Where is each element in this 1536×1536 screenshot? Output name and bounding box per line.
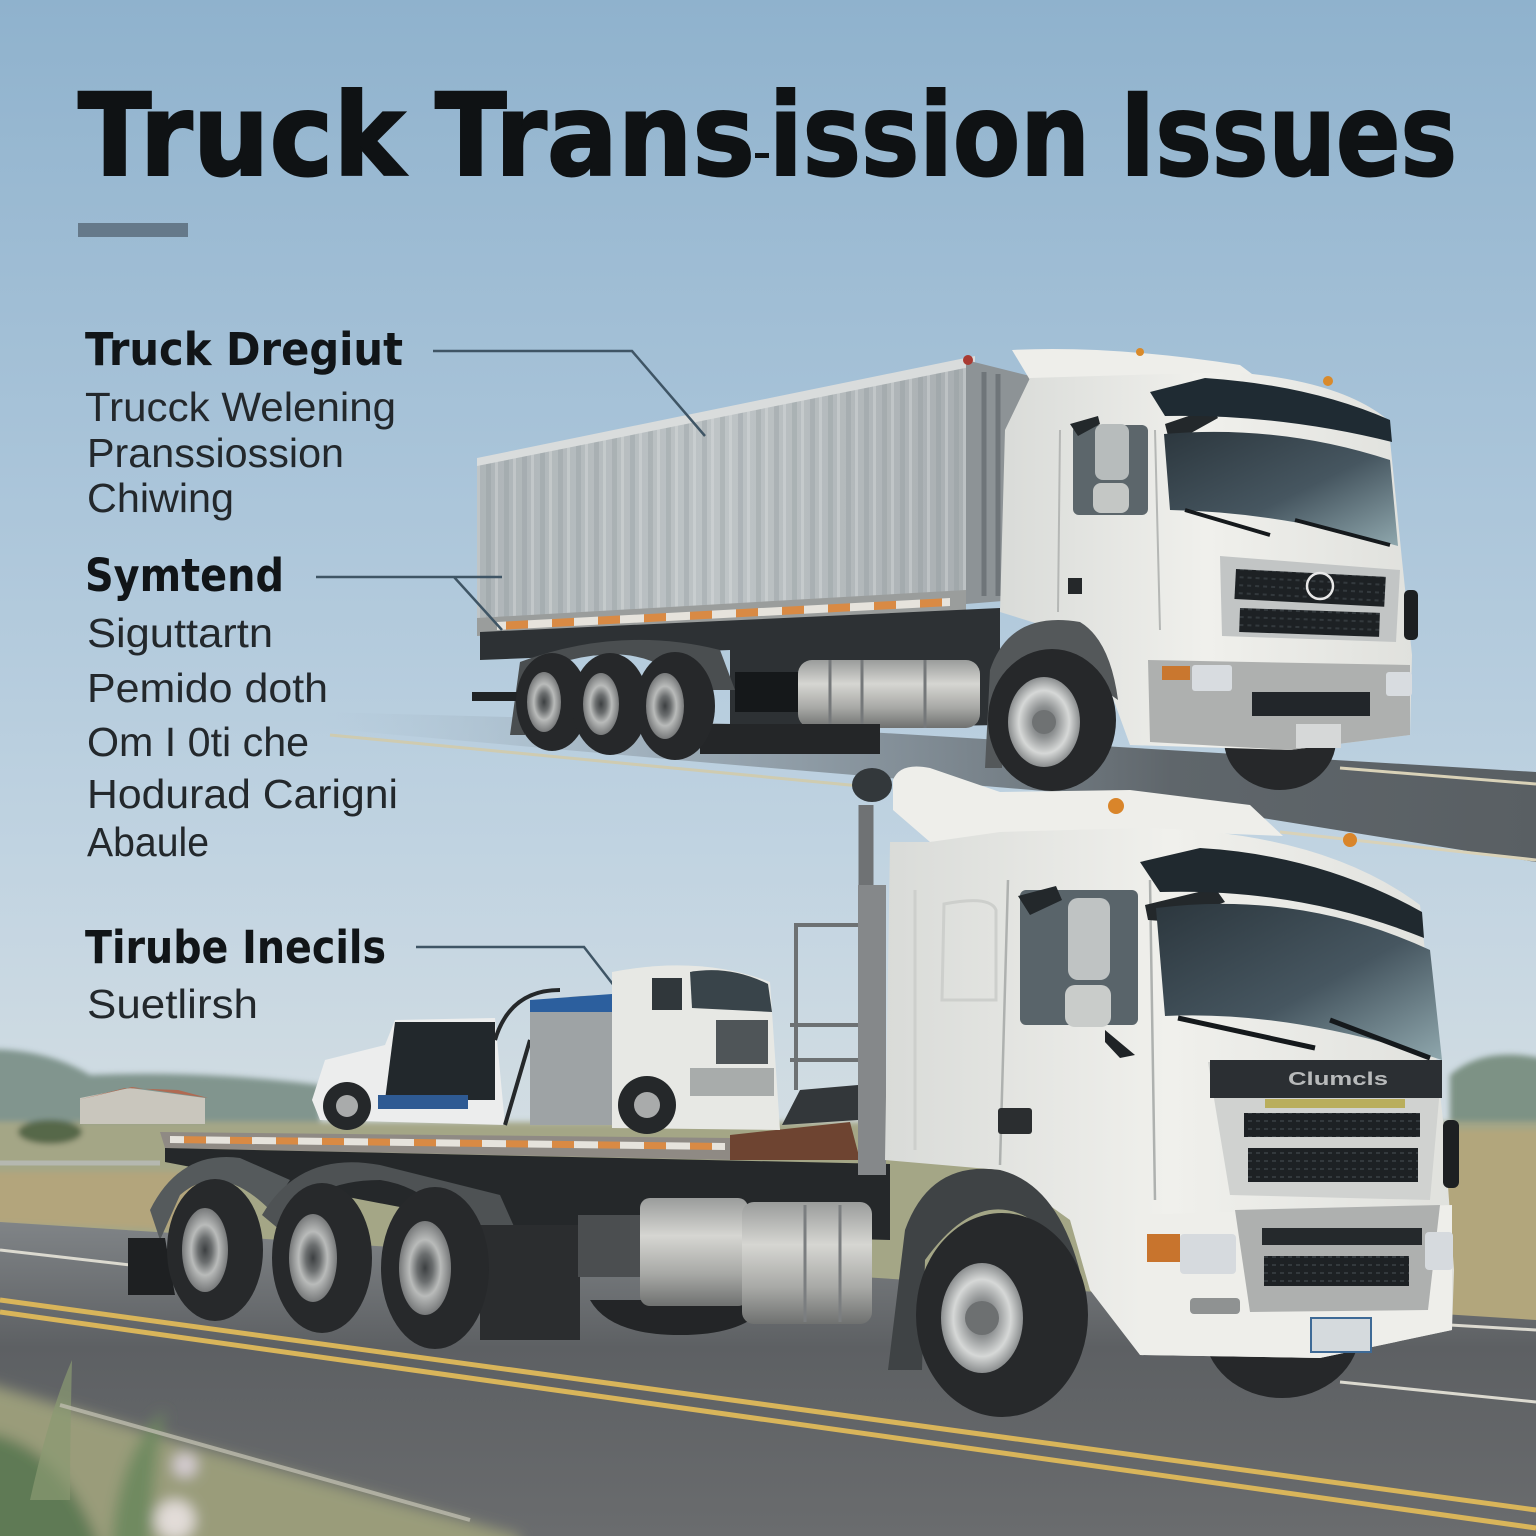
leader line 3 bbox=[416, 947, 615, 987]
text block: section 1: Chiwing bbox=[87, 475, 234, 521]
text block: section 2: Om I 0ti che bbox=[87, 719, 309, 765]
front wheel bbox=[916, 1213, 1088, 1417]
text block: section 2 bbox=[87, 610, 398, 865]
machinery behind cab bbox=[782, 1085, 858, 1125]
leader line 1 bbox=[433, 351, 705, 436]
text block: section 3: Suetlirsh bbox=[87, 981, 258, 1027]
upper road bbox=[320, 712, 1536, 862]
text block: section 1: Pranssiossion bbox=[87, 430, 344, 476]
railing bbox=[790, 925, 880, 1090]
title accent bar bbox=[78, 223, 188, 237]
small white truck bbox=[612, 965, 780, 1134]
cab body bbox=[885, 766, 1459, 1370]
lower truck bbox=[128, 766, 1459, 1417]
rear wheels bbox=[167, 1179, 770, 1349]
front wheel bbox=[988, 649, 1116, 791]
heading: truck dregiut: Truck Dregiut bbox=[85, 323, 403, 376]
title: Truck bbox=[78, 69, 407, 202]
container side bbox=[477, 355, 1030, 636]
chassis bbox=[480, 608, 1000, 730]
title: Issues bbox=[1120, 69, 1457, 202]
exhaust stack bbox=[852, 768, 892, 1175]
heading: symtend: Symtend bbox=[85, 549, 284, 602]
text block: section 2: Siguttartn bbox=[87, 610, 273, 656]
small truck load bbox=[312, 925, 880, 1134]
small pickup bbox=[312, 990, 560, 1130]
title: Trans bbox=[435, 69, 755, 202]
rear mudguards bbox=[128, 1157, 540, 1295]
title: ission bbox=[769, 69, 1090, 202]
rear mudguard bbox=[510, 640, 735, 735]
cab body bbox=[985, 348, 1418, 768]
rear wheels bbox=[516, 652, 880, 760]
blue-roof cab bbox=[530, 996, 612, 1125]
title bbox=[78, 69, 1457, 202]
fuel tank bbox=[798, 660, 980, 728]
text block: section 1: Trucck Welening bbox=[85, 384, 396, 430]
cab body: Clumcls bbox=[1288, 1069, 1388, 1089]
text block: section 2: Abaule bbox=[87, 819, 209, 865]
far front wheel bbox=[1224, 690, 1336, 790]
heading: tirube inecils: Tirube Inecils bbox=[85, 921, 386, 974]
fuel tanks bbox=[578, 1198, 872, 1324]
far front wheel bbox=[1204, 1262, 1360, 1398]
background landscape bbox=[0, 1049, 1536, 1342]
text block: section 2: Pemido doth bbox=[87, 665, 328, 711]
upper truck bbox=[472, 348, 1418, 791]
text block: section 2: Hodurad Carigni bbox=[87, 771, 398, 817]
foreground grass bbox=[0, 1360, 520, 1536]
lower road bbox=[0, 1222, 1536, 1536]
leader line 2 bbox=[316, 577, 502, 630]
flatbed deck bbox=[160, 1122, 890, 1240]
text block: section 1 bbox=[85, 384, 396, 521]
